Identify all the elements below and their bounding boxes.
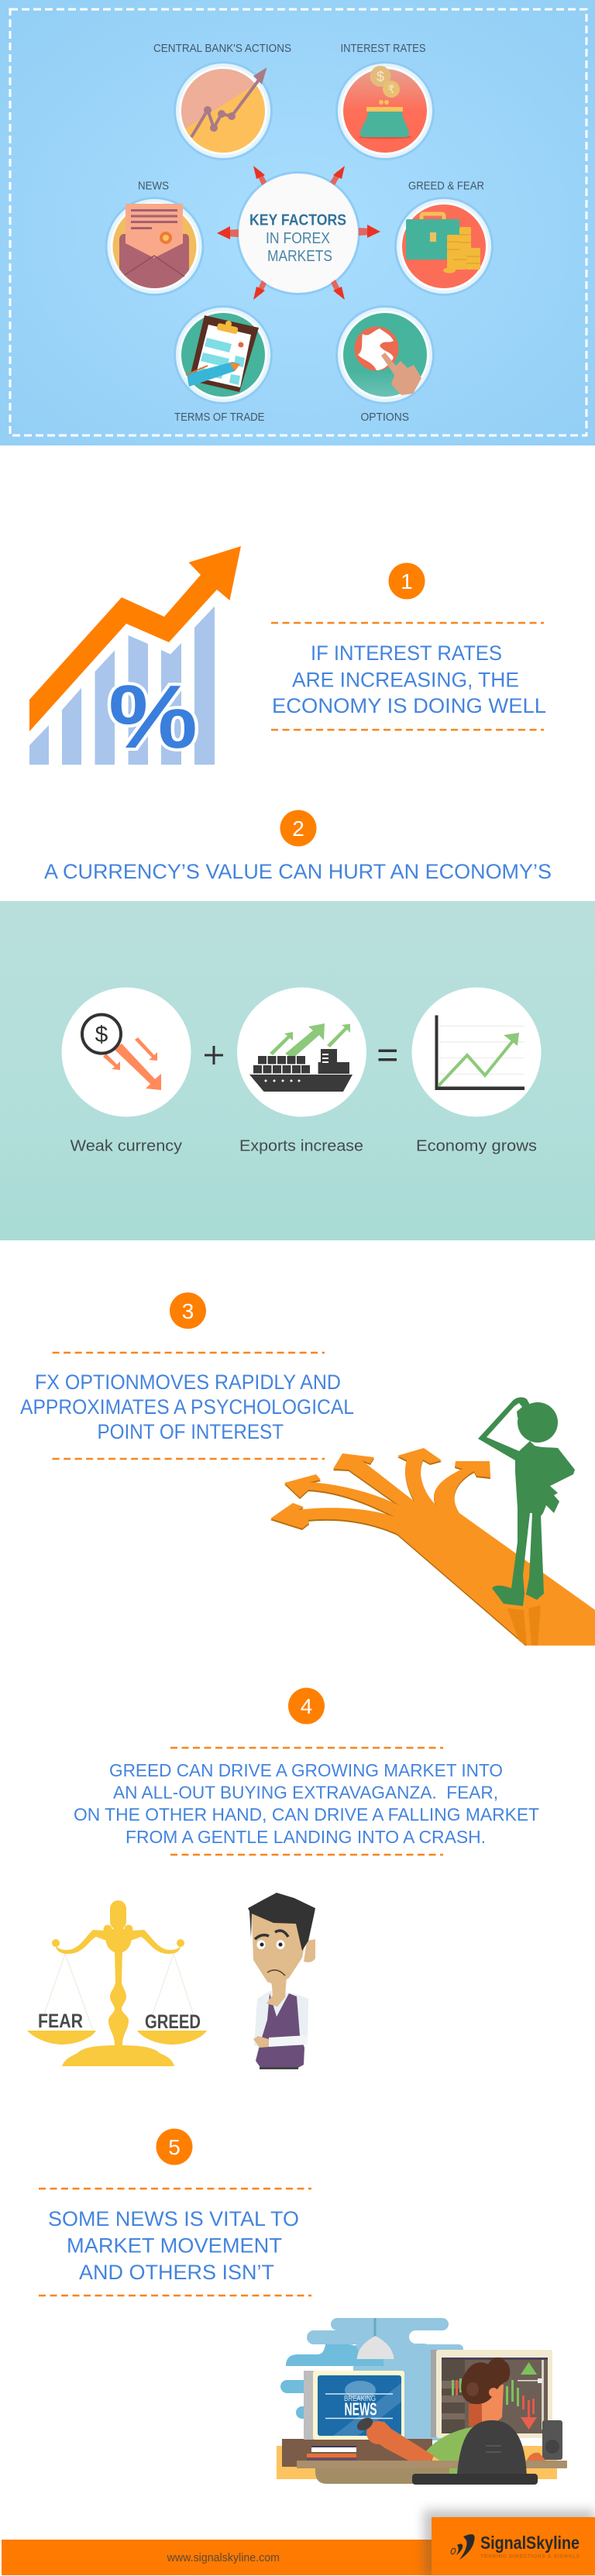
illustration: forking arrows road [270,1448,595,1647]
number badge 3: 3 [182,1299,194,1323]
equation step: economy grows: Economy grows [416,1137,537,1154]
illustration: thinking green figure [478,1397,575,1606]
text block 4: AN ALL-OUT BUYING EXTRAVAGANZA. FEAR, [113,1782,498,1802]
central hub circle [236,171,360,295]
section 4: greed and fear [27,1687,539,2069]
icon: rising trend line [191,67,267,137]
number badge 2: 2 [292,817,304,841]
plus sign [205,1046,223,1064]
number badge 1 [389,562,425,600]
icon: briefcase and coin stacks [406,214,480,273]
text block 1: ECONOMY IS DOING WELL [272,694,546,717]
text block 5: AND OTHERS ISN’T [79,2261,274,2284]
equation step: economy grows [412,987,541,1154]
panel: weak currency equation [0,901,595,1240]
factor: news [105,180,205,296]
equation step: weak currency: Weak currency [71,1137,182,1154]
footer logo box: TRADING DIRECTIONS & SIGNALS [480,2554,580,2560]
factor: central bank's actions [153,42,291,160]
icon: logo swoosh [450,2534,475,2560]
hub title [249,212,346,265]
illustration: fear and greed scale: FEAR [38,2010,83,2032]
illustration: fear and greed scale [27,1900,207,2066]
text block 4: GREED CAN DRIVE A GROWING MARKET INTO [109,1760,503,1780]
section 5: news [39,2129,567,2485]
chart: bars with rising arrow and percent [29,546,241,767]
illustration: fear and greed scale: GREED [145,2011,201,2033]
text block 5 [39,2189,311,2296]
factor: terms of trade [174,305,273,424]
icon: purse and coins: $ [377,69,384,84]
arrows radiating from hub [217,166,380,300]
figure left leg [492,1507,530,1606]
text block 1: ARE INCREASING, THE [292,668,519,691]
equation step: weak currency: $ [95,1022,108,1047]
factor: greed and fear: GREED & FEAR [408,180,484,192]
text block 5: MARKET MOVEMENT [67,2234,282,2258]
hub title: MARKETS [267,248,332,265]
panel: key factors hero [0,0,595,445]
equals sign [378,1049,397,1061]
footer logo box: SignalSkyline [480,2533,580,2553]
heading 2: A CURRENCY’S VALUE CAN HURT AN ECONOMY’S [44,860,552,883]
text block 4 [74,1748,539,1855]
illustration: worried man [248,1893,315,2069]
factor: options: OPTIONS [361,411,409,424]
number badge 2 [280,810,316,846]
factor: central bank's actions: CENTRAL BANK'S ACTIONS [153,42,291,55]
text block 3 [20,1353,354,1459]
text block 4: FROM A GENTLE LANDING INTO A CRASH. [126,1827,486,1847]
section 2: currency value [0,810,595,1240]
factor: news: NEWS [138,180,169,192]
illustration: trader watching breaking news [277,2318,567,2485]
factor: interest rates [335,42,435,160]
illustration: trader watching breaking news: NEWS [344,2399,377,2420]
footer bar: www.signalskyline.com [167,2551,280,2564]
icon: purse and coins: ₹ [388,83,395,95]
illustration: trader watching breaking news: BREAKING [344,2395,376,2403]
text block 3: POINT OF INTEREST [98,1420,284,1443]
section 1: interest rates [29,546,546,767]
equation step: exports increase: Exports increase [239,1137,363,1154]
icon: clipboard and pen [186,315,259,392]
hub title: IN FOREX [266,230,330,247]
number badge 4 [288,1687,325,1725]
factor: terms of trade: TERMS OF TRADE [174,411,265,424]
chart: bars with rising arrow and percent: % [108,666,198,767]
icon: globe and pointing hand [355,327,421,395]
factor: options [335,305,435,424]
text block 4: ON THE OTHER HAND, CAN DRIVE A FALLING MARKET [74,1804,539,1825]
hub title: KEY FACTORS [249,212,346,229]
factor: greed and fear [394,180,494,296]
number badge 4: 4 [301,1694,312,1718]
equation step: exports increase [237,987,366,1154]
number badge 5 [156,2129,192,2165]
figure right leg [526,1513,544,1600]
footer bar [2,2540,595,2575]
icon: envelope with letter [119,204,189,291]
number badge 3 [170,1292,206,1329]
number badge 5: 5 [168,2135,181,2159]
text block 5: SOME NEWS IS VITAL TO [48,2207,299,2230]
text block 1: IF INTEREST RATES [311,641,502,665]
factor: interest rates: INTEREST RATES [341,42,426,55]
footer logo box [424,2510,595,2576]
icon: purse and coins [359,66,411,139]
text block 3: FX OPTIONMOVES RAPIDLY AND [35,1371,341,1394]
number badge 1: 1 [401,569,413,593]
text block 1 [271,623,546,730]
equation step: weak currency [62,987,191,1154]
text block 3: APPROXIMATES A PSYCHOLOGICAL [20,1395,354,1419]
section 3: fx option [20,1292,595,1647]
